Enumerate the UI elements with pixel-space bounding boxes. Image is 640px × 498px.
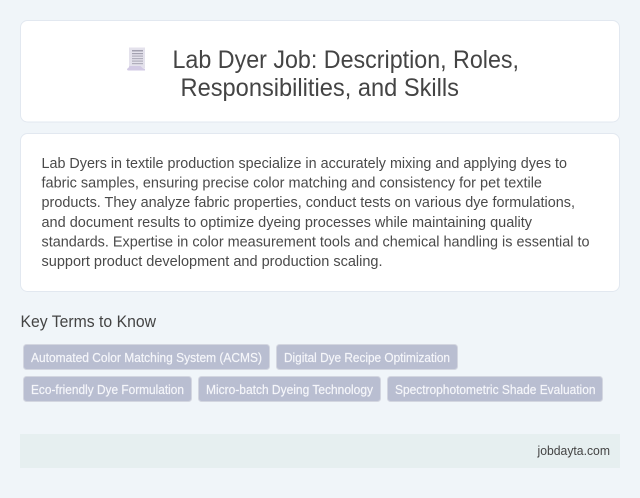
chip: ACMS: Automated Color Matching System (ACMS) — [31, 351, 262, 365]
chip: spectrophotometric — [388, 376, 602, 402]
description text: support product development and production scaling. — [42, 254, 382, 270]
chip: micro-batch: Micro-batch Dyeing Technology — [206, 383, 374, 397]
icon: paper scroll document — [127, 48, 145, 70]
chip: spectrophotometric: Spectrophotometric Shade Evaluation — [395, 383, 596, 397]
chip: eco-friendly: Eco-friendly Dye Formulation — [31, 383, 184, 397]
chip group: key terms — [24, 344, 602, 402]
footer source text: jobdayta.com — [537, 444, 610, 458]
title: Responsibilities, and Skills — [180, 74, 459, 102]
heading: key terms: Key Terms to Know — [20, 313, 156, 331]
chip: ACMS — [24, 344, 270, 370]
footer bar — [20, 434, 620, 468]
description text — [42, 156, 590, 270]
panel: description card — [20, 134, 620, 292]
title — [172, 46, 519, 102]
description text: fabric samples, ensuring precise color matching and consistency for pet textile — [42, 176, 542, 192]
title: Lab Dyer Job: Description, Roles, — [172, 46, 519, 74]
chip: digital dye recipe: Digital Dye Recipe Optimization — [284, 351, 450, 365]
description text: products. They analyze fabric properties, conduct tests on various dye formulations, — [42, 195, 575, 211]
description text: Lab Dyers in textile production specialize in accurately mixing and applying dyes to — [42, 156, 567, 172]
chip: eco-friendly — [24, 376, 192, 402]
panel: header card — [20, 20, 620, 122]
description text: and document results to optimize dyeing processes while maintaining quality — [42, 215, 533, 231]
chip: micro-batch — [198, 376, 380, 402]
description text: standards. Expertise in color measurement tools and chemical handling is essential to — [42, 234, 590, 250]
chip: digital dye recipe — [276, 344, 458, 370]
